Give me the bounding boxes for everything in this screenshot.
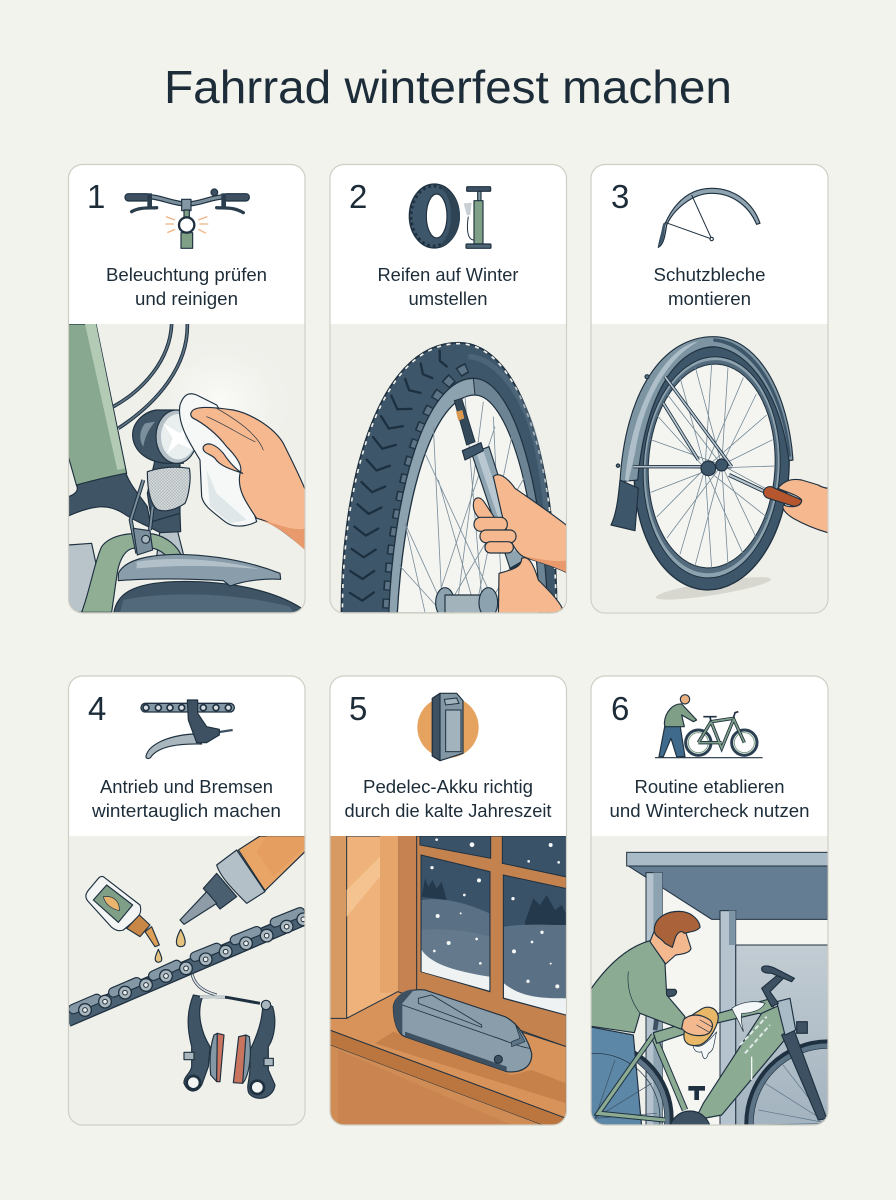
bike frame	[653, 1035, 685, 1110]
icon: mudguard	[658, 188, 760, 247]
label: step 6: und Wintercheck nutzen	[610, 801, 810, 821]
illustration: pumping a winter tyre	[330, 324, 568, 627]
label: step 1	[106, 265, 267, 309]
label: step 1: Beleuchtung prüfen	[106, 265, 267, 285]
illustration: lubricating chain and brake pads	[67, 836, 310, 1125]
man washing the bike	[589, 941, 685, 1033]
panel: step 2 tyres	[330, 164, 568, 627]
illustration: wheel with mudguard and screwdriver	[591, 324, 830, 612]
label: step 5: Pedelec-Akku richtig	[363, 777, 533, 797]
step number 6: 6	[611, 690, 629, 727]
illustration: washing e-bike under shelter	[592, 836, 828, 1124]
label: step 3: Schutzbleche	[654, 265, 766, 285]
panel: step 6 routine	[590, 675, 828, 1126]
label: step 4	[91, 777, 281, 821]
step number 5: 5	[349, 690, 367, 727]
step number 3: 3	[611, 178, 629, 215]
title: Fahrrad winterfest machen	[164, 61, 732, 113]
tread chevrons	[350, 351, 447, 601]
icon: tyre and floor pump	[409, 184, 491, 248]
front wheel	[744, 1039, 828, 1124]
label: step 3	[654, 265, 766, 309]
panel: step 1 lighting	[68, 164, 307, 617]
label: step 2: Reifen auf Winter	[378, 265, 519, 285]
label: step 6: Routine etablieren	[634, 777, 784, 797]
icon: battery on orange circle	[417, 693, 479, 761]
step number 2: 2	[349, 178, 367, 215]
label: step 3: montieren	[668, 289, 751, 309]
label: step 4: Antrieb und Bremsen	[100, 777, 273, 797]
icon: handlebar with lamp	[125, 189, 249, 248]
illustration: battery on indoor window sill	[330, 836, 568, 1125]
icon: person with bicycle	[655, 695, 763, 758]
label: step 5: durch die kalte Jahreszeit	[344, 801, 552, 821]
label: step 2: umstellen	[408, 289, 488, 309]
step number 1: 1	[87, 178, 105, 215]
panel: step 4 drivetrain and brakes	[67, 676, 310, 1125]
label: step 5	[344, 777, 552, 821]
label: step 1: und reinigen	[135, 289, 238, 309]
label: step 6	[610, 777, 810, 821]
panel: step 3 mudguards	[591, 164, 830, 613]
rear wheel	[635, 1050, 674, 1124]
label: step 2	[378, 265, 519, 309]
icon: chain and brake lever	[143, 700, 233, 758]
label: step 4: wintertauglich machen	[91, 801, 281, 821]
panel: step 5 battery	[330, 676, 568, 1125]
step number 4: 4	[88, 690, 106, 727]
illustration: wiping the bike light	[68, 324, 307, 617]
